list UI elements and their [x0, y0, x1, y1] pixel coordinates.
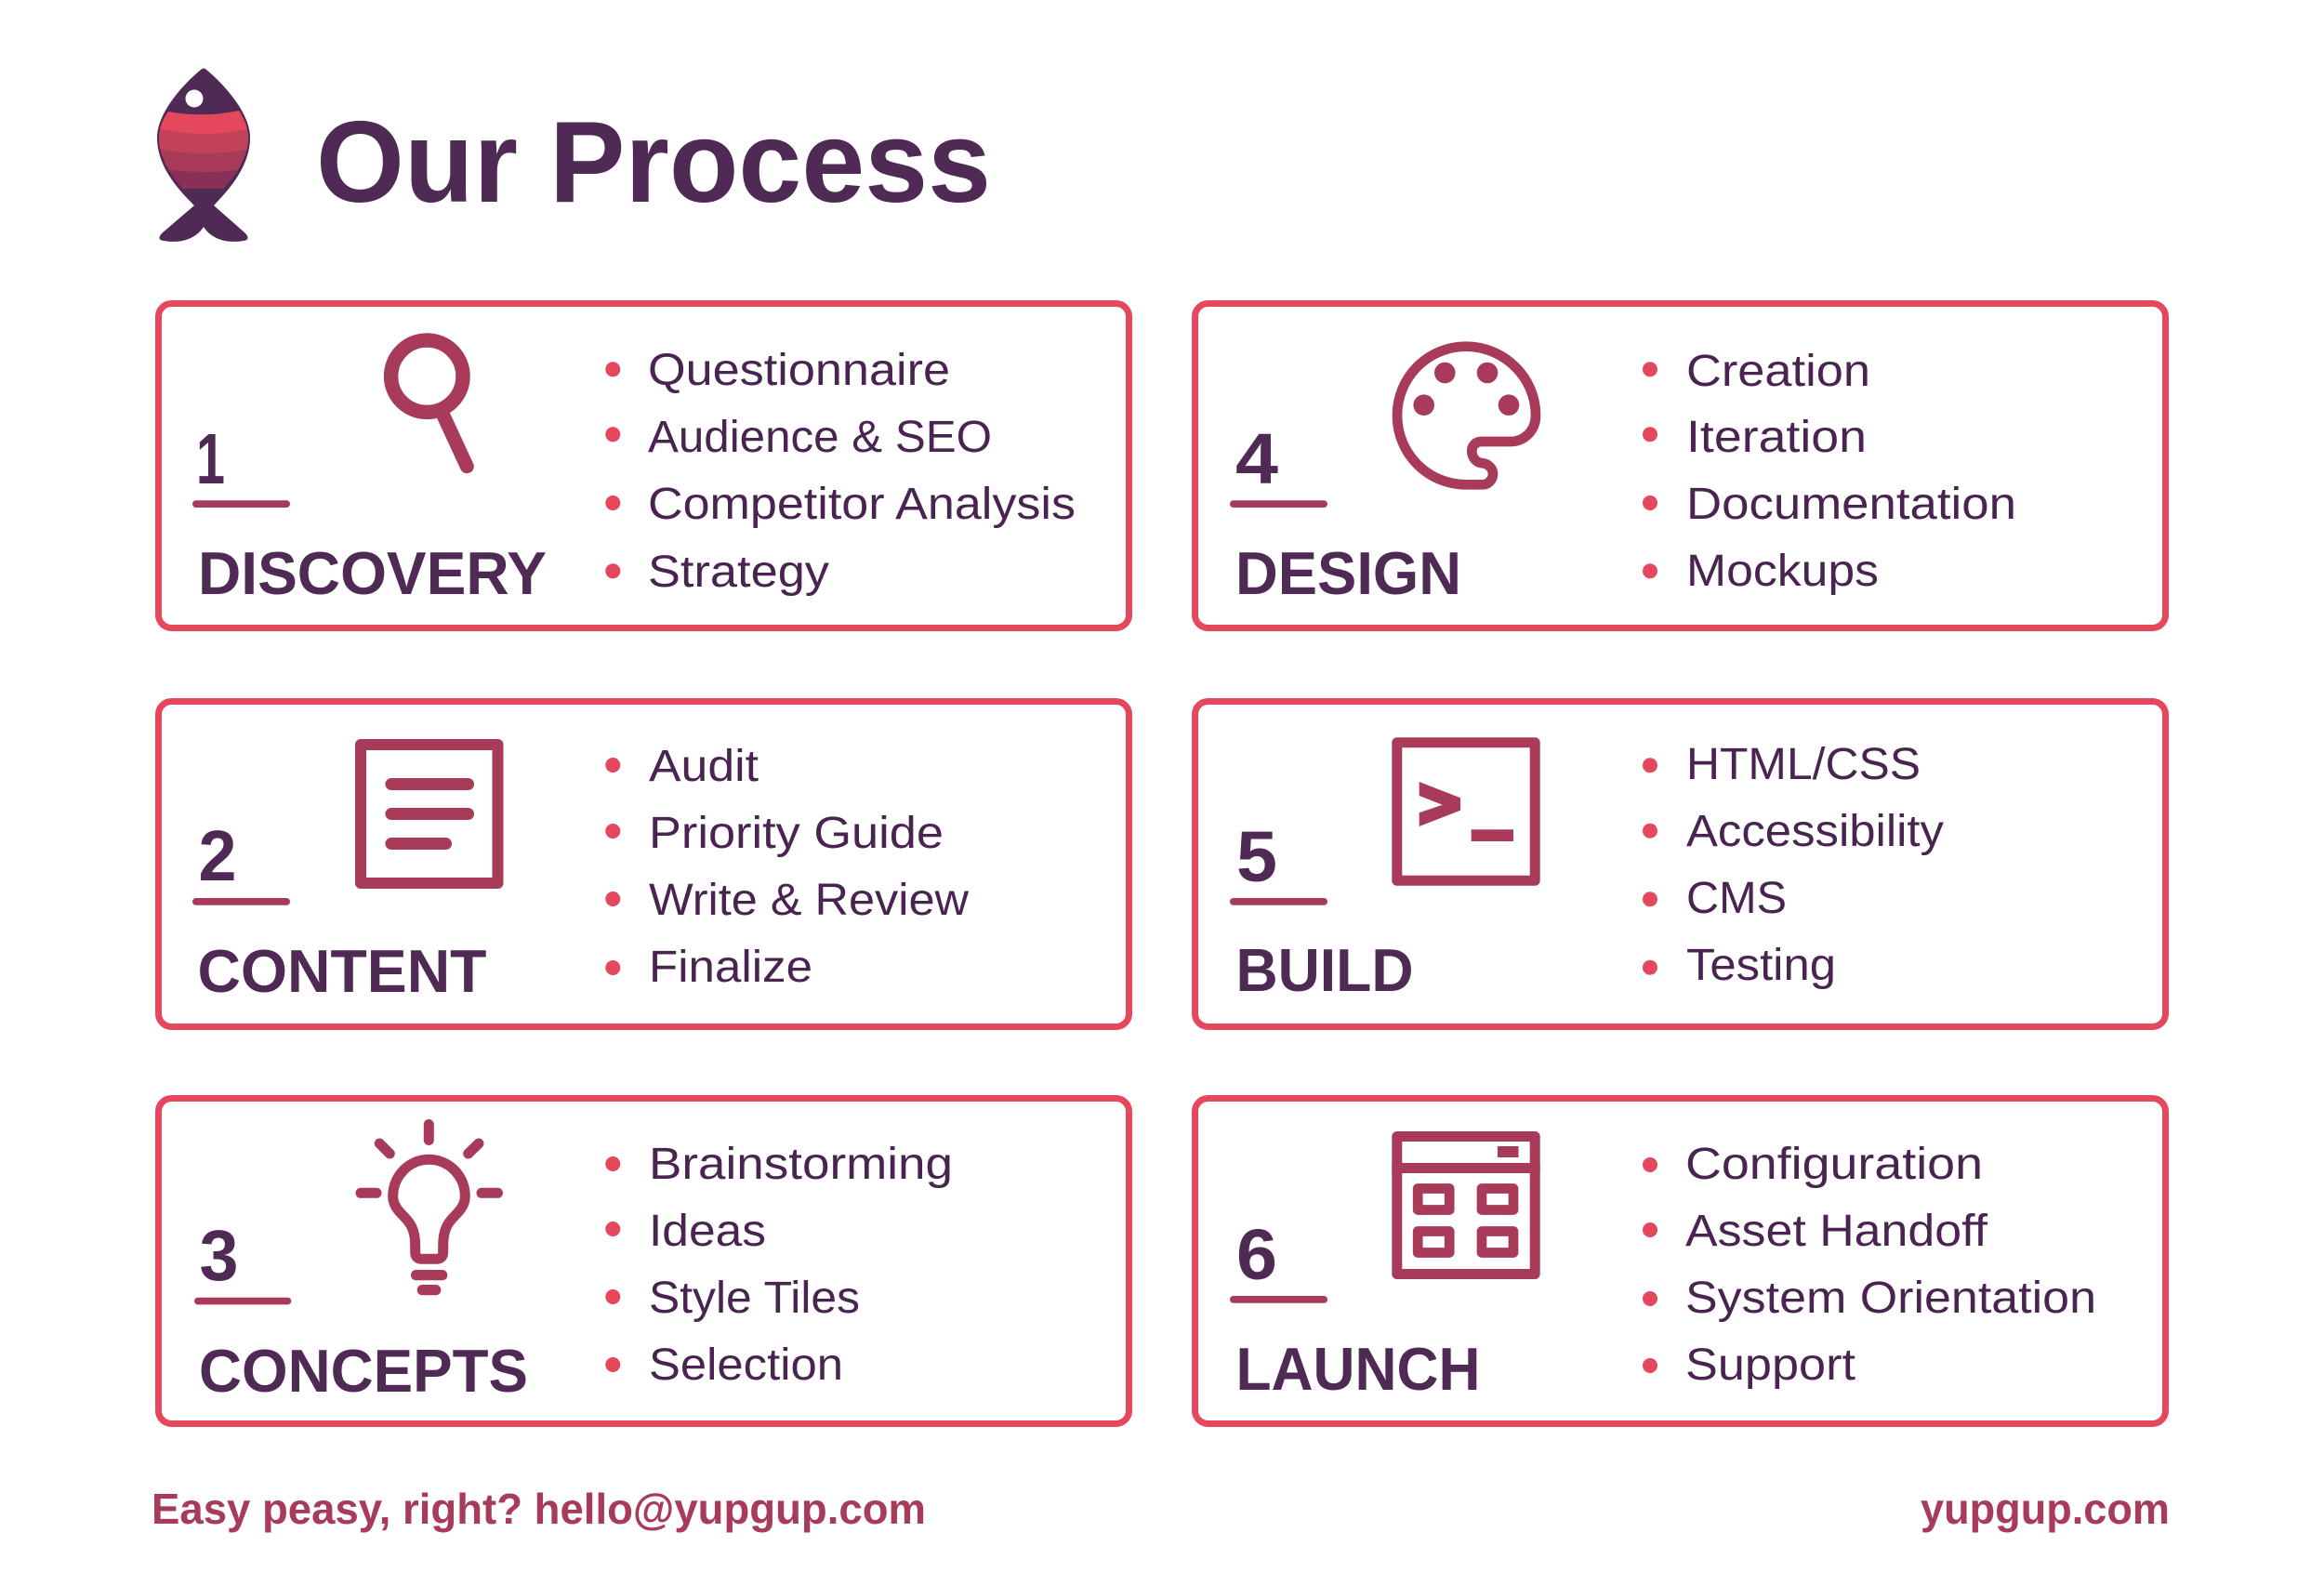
panel: concepts	[158, 1099, 1129, 1424]
icon: document	[361, 745, 498, 883]
list: content tasks: Write & Review	[649, 876, 969, 925]
title: Our Process	[316, 99, 991, 227]
step number 3: 3	[199, 1216, 238, 1296]
list: design tasks: Creation	[1686, 347, 1870, 396]
heading: launch: LAUNCH	[1236, 1335, 1480, 1403]
list: concepts tasks: Style Tiles	[649, 1274, 860, 1323]
list: concepts tasks	[605, 1140, 953, 1390]
icon: paint palette	[1397, 347, 1536, 484]
list: design tasks: Mockups	[1686, 547, 1879, 596]
number underline	[1230, 1296, 1327, 1303]
panel: build	[1195, 701, 2166, 1026]
number underline	[192, 500, 290, 508]
heading: discovery: DISCOVERY	[198, 539, 547, 607]
footer: contact line: Easy peasy, right? hello@yupgup.com	[152, 1485, 926, 1533]
list: launch tasks: Support	[1685, 1341, 1855, 1390]
list: discovery tasks: Questionnaire	[648, 346, 950, 395]
step number 5: 5	[1236, 817, 1277, 897]
list: content tasks: Finalize	[649, 943, 812, 992]
number underline	[1230, 500, 1327, 508]
step number 2: 2	[199, 816, 236, 896]
list: content tasks: Priority Guide	[649, 809, 944, 858]
list: launch tasks	[1643, 1140, 2096, 1390]
list: concepts tasks: Brainstorming	[649, 1140, 953, 1189]
list: content tasks: Audit	[649, 742, 759, 791]
list: discovery tasks: Audience & SEO	[648, 413, 992, 462]
list: content tasks	[605, 742, 969, 992]
footer: website: yupgup.com	[1921, 1485, 2170, 1533]
list: build tasks	[1643, 740, 1944, 990]
step number 6: 6	[1236, 1215, 1277, 1295]
number underline	[1230, 898, 1327, 905]
list: launch tasks: Configuration	[1685, 1140, 1983, 1189]
heading: content: CONTENT	[197, 937, 487, 1005]
icon: terminal window	[1397, 743, 1535, 880]
icon: light bulb	[361, 1125, 498, 1295]
panel: launch	[1195, 1099, 2166, 1424]
list: design tasks: Documentation	[1686, 480, 2016, 529]
list: discovery tasks	[605, 346, 1076, 597]
list: concepts tasks: Selection	[649, 1341, 843, 1390]
list: concepts tasks: Ideas	[649, 1207, 766, 1256]
icon: magnifying glass	[391, 340, 467, 467]
list: build tasks: Testing	[1686, 941, 1836, 990]
icon: fish logo	[153, 69, 256, 242]
panel: design	[1195, 303, 2166, 628]
heading: build: BUILD	[1236, 936, 1413, 1004]
list: discovery tasks: Strategy	[648, 548, 829, 597]
list: design tasks: Iteration	[1686, 413, 1867, 462]
list: launch tasks: Asset Handoff	[1685, 1207, 1988, 1256]
heading: design: DESIGN	[1235, 539, 1461, 607]
list: build tasks: HTML/CSS	[1686, 740, 1921, 789]
icon: browser window grid	[1392, 1136, 1540, 1274]
list: design tasks	[1643, 347, 2016, 596]
list: build tasks: CMS	[1686, 874, 1787, 923]
list: launch tasks: System Orientation	[1685, 1274, 2096, 1323]
step number 1: 1	[196, 419, 225, 499]
number underline	[194, 1298, 291, 1304]
step number 4: 4	[1235, 419, 1278, 499]
heading: concepts: CONCEPTS	[199, 1337, 528, 1405]
panel: discovery	[158, 303, 1129, 628]
number underline	[192, 898, 290, 905]
list: build tasks: Accessibility	[1686, 807, 1944, 856]
list: discovery tasks: Competitor Analysis	[648, 480, 1076, 529]
panel: content	[158, 701, 1129, 1026]
